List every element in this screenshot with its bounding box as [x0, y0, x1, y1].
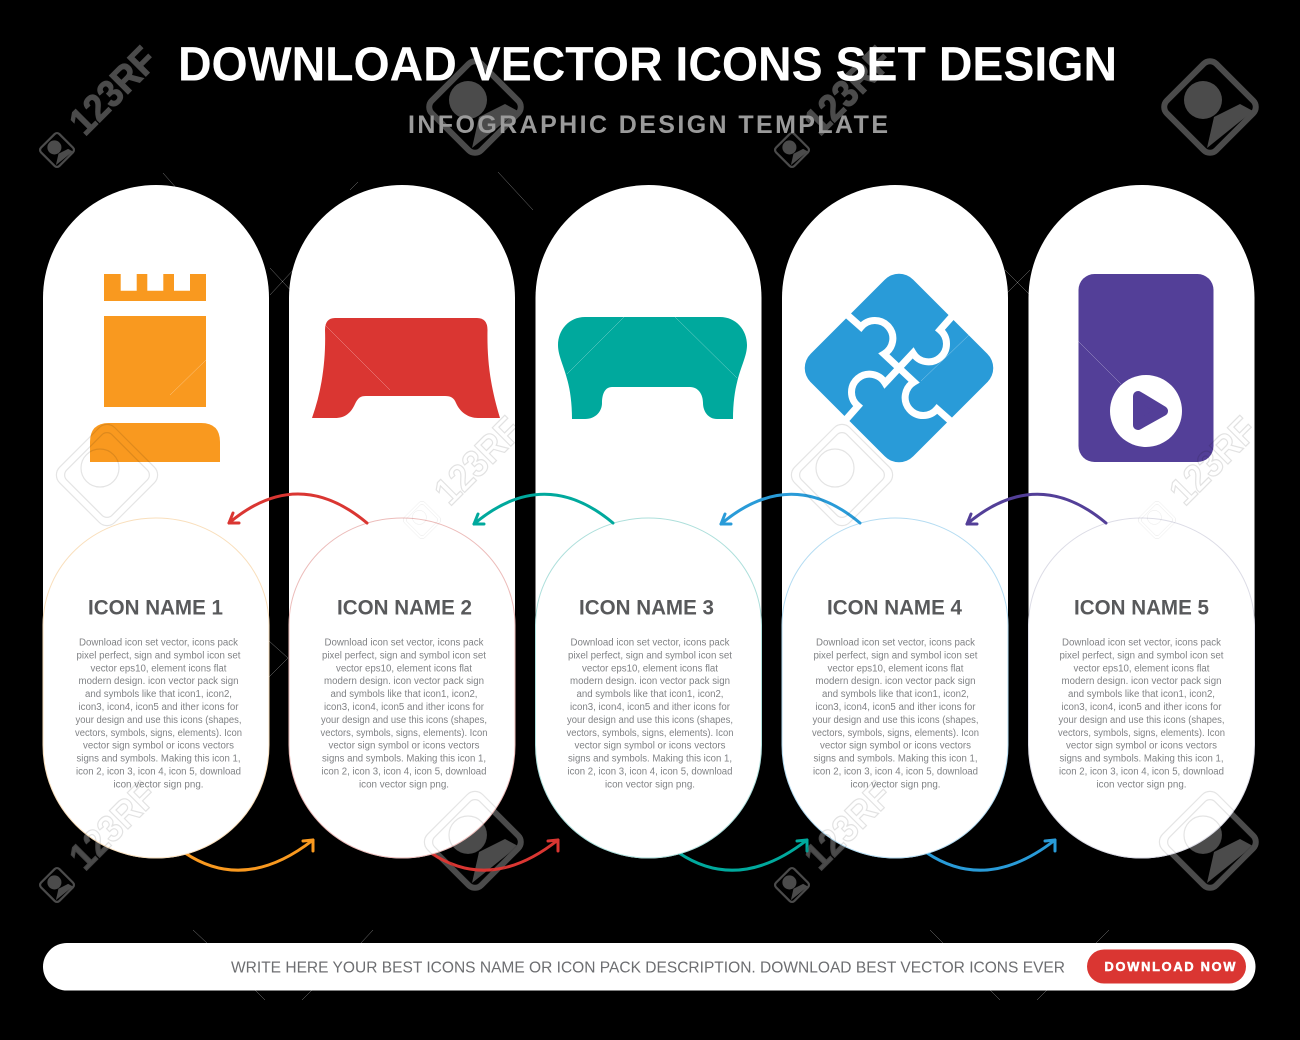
text block 2: [320, 596, 488, 790]
arrow: teal: [679, 840, 807, 870]
text block 1: vectors, symbols, signs, elements). Icon: [75, 728, 242, 739]
text block 2: vector sign symbol or icons vectors: [328, 741, 480, 752]
lower arrows: [185, 840, 1055, 870]
arrow: dark teal: [474, 494, 613, 524]
text block 2: icon vector sign png.: [359, 779, 449, 790]
text block 5: icon3, icon4, icon5 and ither icons for: [1062, 702, 1222, 713]
text block 3: vectors, symbols, signs, elements). Icon: [566, 728, 734, 739]
watermarks on black: 123RF: [62, 774, 166, 878]
download button: DOWNLOAD NOW: [1104, 959, 1236, 974]
text block 5: [1058, 596, 1225, 790]
arrow: red: [431, 840, 558, 870]
text block 5: icon 2, icon 3, icon 4, icon 5, download: [1059, 766, 1224, 777]
oval outline 4: [782, 518, 1008, 858]
icon: video file: [1078, 274, 1214, 462]
text block 1: signs and symbols. Making this icon 1,: [76, 754, 240, 765]
text block 4: vector eps10, element icons flat: [828, 663, 964, 674]
bottom bar: [43, 943, 1256, 990]
text block 4: modern design. icon vector pack sign: [816, 676, 976, 687]
text block 3: icon3, icon4, icon5 and ither icons for: [570, 702, 731, 713]
watermarks on black: [39, 39, 1259, 903]
watermarks on white: 123RF: [427, 409, 531, 513]
arrow: orange: [185, 840, 313, 870]
text block 5: signs and symbols. Making this icon 1,: [1060, 754, 1224, 765]
panel 1: [43, 185, 269, 858]
watermarks on white: 123RF: [1162, 409, 1266, 513]
text block 3: Download icon set vector, icons pack: [570, 637, 730, 648]
arrow: dark blue: [721, 494, 860, 524]
text block 1: your design and use this icons (shapes,: [76, 715, 242, 726]
heading 5: ICON NAME 5: [1074, 596, 1209, 620]
text block 5: vector eps10, element icons flat: [1074, 663, 1210, 674]
heading 4: ICON NAME 4: [827, 596, 962, 620]
oval outline 5: [1028, 518, 1254, 858]
text block 5: modern design. icon vector pack sign: [1062, 676, 1222, 687]
panel 3: [536, 185, 762, 858]
text block 2: icon 2, icon 3, icon 4, icon 5, download: [322, 766, 486, 777]
subtitle: INFOGRAPHIC DESIGN TEMPLATE: [408, 111, 888, 139]
oval outline 3: [536, 518, 762, 858]
text block 1: Download icon set vector, icons pack: [79, 637, 239, 648]
oval outline 2: [289, 518, 515, 858]
icon: puzzle: [796, 265, 1002, 471]
text block 4: and symbols like that icon1, icon2,: [822, 689, 969, 700]
fine watermark lines: [163, 172, 1121, 1000]
watermarks on black: 123RF: [797, 774, 901, 878]
text block 4: icon 2, icon 3, icon 4, icon 5, download: [813, 766, 978, 777]
icon: chess rook: [90, 274, 220, 462]
text block 1: and symbols like that icon1, icon2,: [85, 689, 232, 700]
heading 3: ICON NAME 3: [579, 596, 714, 620]
text block 4: Download icon set vector, icons pack: [816, 637, 976, 648]
text block 3: pixel perfect, sign and symbol icon set: [568, 650, 732, 661]
text block 3: vector sign symbol or icons vectors: [574, 741, 726, 752]
panel 2: [289, 185, 515, 858]
heading 1: ICON NAME 1: [88, 596, 223, 620]
text block 3: signs and symbols. Making this icon 1,: [568, 754, 732, 765]
arrow: dark red: [229, 494, 367, 523]
watermarks on white: 123RF: [62, 774, 166, 878]
watermarks on black: 123RF: [62, 39, 166, 143]
text block 2: your design and use this icons (shapes,: [321, 715, 487, 726]
oval outline 1: [43, 518, 269, 858]
panel 4: [782, 185, 1008, 858]
text block 3: [566, 596, 734, 790]
text block 2: and symbols like that icon1, icon2,: [330, 689, 478, 700]
text block 3: modern design. icon vector pack sign: [570, 676, 730, 687]
upper arrows: [229, 494, 1106, 524]
text block 4: pixel perfect, sign and symbol icon set: [814, 650, 978, 661]
text block 2: pixel perfect, sign and symbol icon set: [322, 650, 486, 661]
watermarks on black: 123RF: [797, 39, 901, 143]
text block 1: pixel perfect, sign and symbol icon set: [76, 650, 241, 661]
text block 4: icon3, icon4, icon5 and ither icons for: [816, 702, 976, 713]
text block 5: vectors, symbols, signs, elements). Icon: [1058, 728, 1225, 739]
text block 1: [75, 596, 242, 790]
text block 2: signs and symbols. Making this icon 1,: [322, 754, 486, 765]
text block 1: icon3, icon4, icon5 and ither icons for: [78, 702, 239, 713]
watermarks on white: 123RF: [797, 774, 901, 878]
text block 2: modern design. icon vector pack sign: [324, 676, 484, 687]
text block 3: vector eps10, element icons flat: [582, 663, 718, 674]
download button: [1087, 950, 1246, 984]
text block 2: vector eps10, element icons flat: [336, 663, 472, 674]
text block 1: vector eps10, element icons flat: [90, 663, 227, 674]
heading 2: ICON NAME 2: [337, 596, 472, 620]
text block 3: your design and use this icons (shapes,: [567, 715, 733, 726]
text block 2: icon3, icon4, icon5 and ither icons for: [324, 702, 485, 713]
title: DOWNLOAD VECTOR ICONS SET DESIGN: [178, 38, 1117, 91]
text block 3: icon vector sign png.: [605, 779, 695, 790]
icon: red stool: [312, 318, 500, 418]
text block 4: vector sign symbol or icons vectors: [820, 741, 971, 752]
text block 5: your design and use this icons (shapes,: [1058, 715, 1224, 726]
text block 3: icon 2, icon 3, icon 4, icon 5, download: [568, 766, 732, 777]
arrow: purple: [967, 494, 1106, 524]
text block 5: pixel perfect, sign and symbol icon set: [1060, 650, 1224, 661]
text block 4: icon vector sign png.: [850, 779, 940, 790]
text block 4: vectors, symbols, signs, elements). Icon: [812, 728, 979, 739]
text block 1: icon 2, icon 3, icon 4, icon 5, download: [76, 766, 241, 777]
panel 5: [1028, 185, 1254, 858]
text block 4: signs and symbols. Making this icon 1,: [814, 754, 978, 765]
icon: teal stool: [558, 317, 747, 419]
text block 3: and symbols like that icon1, icon2,: [576, 689, 724, 700]
text block 1: modern design. icon vector pack sign: [78, 676, 238, 687]
text block 1: icon vector sign png.: [114, 779, 204, 790]
watermarks on white: [52, 409, 1266, 897]
text block 5: icon vector sign png.: [1096, 779, 1186, 790]
text block 2: Download icon set vector, icons pack: [324, 637, 484, 648]
text block 2: vectors, symbols, signs, elements). Icon: [320, 728, 488, 739]
text block 4: [812, 596, 979, 790]
bar description: WRITE HERE YOUR BEST ICONS NAME OR ICON PACK DESCRIPTION. DOWNLOAD BEST VECTOR ICONS EVER: [231, 960, 1065, 976]
arrow: blue: [927, 840, 1055, 870]
text block 4: your design and use this icons (shapes,: [812, 715, 978, 726]
text block 1: vector sign symbol or icons vectors: [83, 741, 234, 752]
text block 5: Download icon set vector, icons pack: [1062, 637, 1222, 648]
text block 5: vector sign symbol or icons vectors: [1066, 741, 1217, 752]
text block 5: and symbols like that icon1, icon2,: [1068, 689, 1215, 700]
